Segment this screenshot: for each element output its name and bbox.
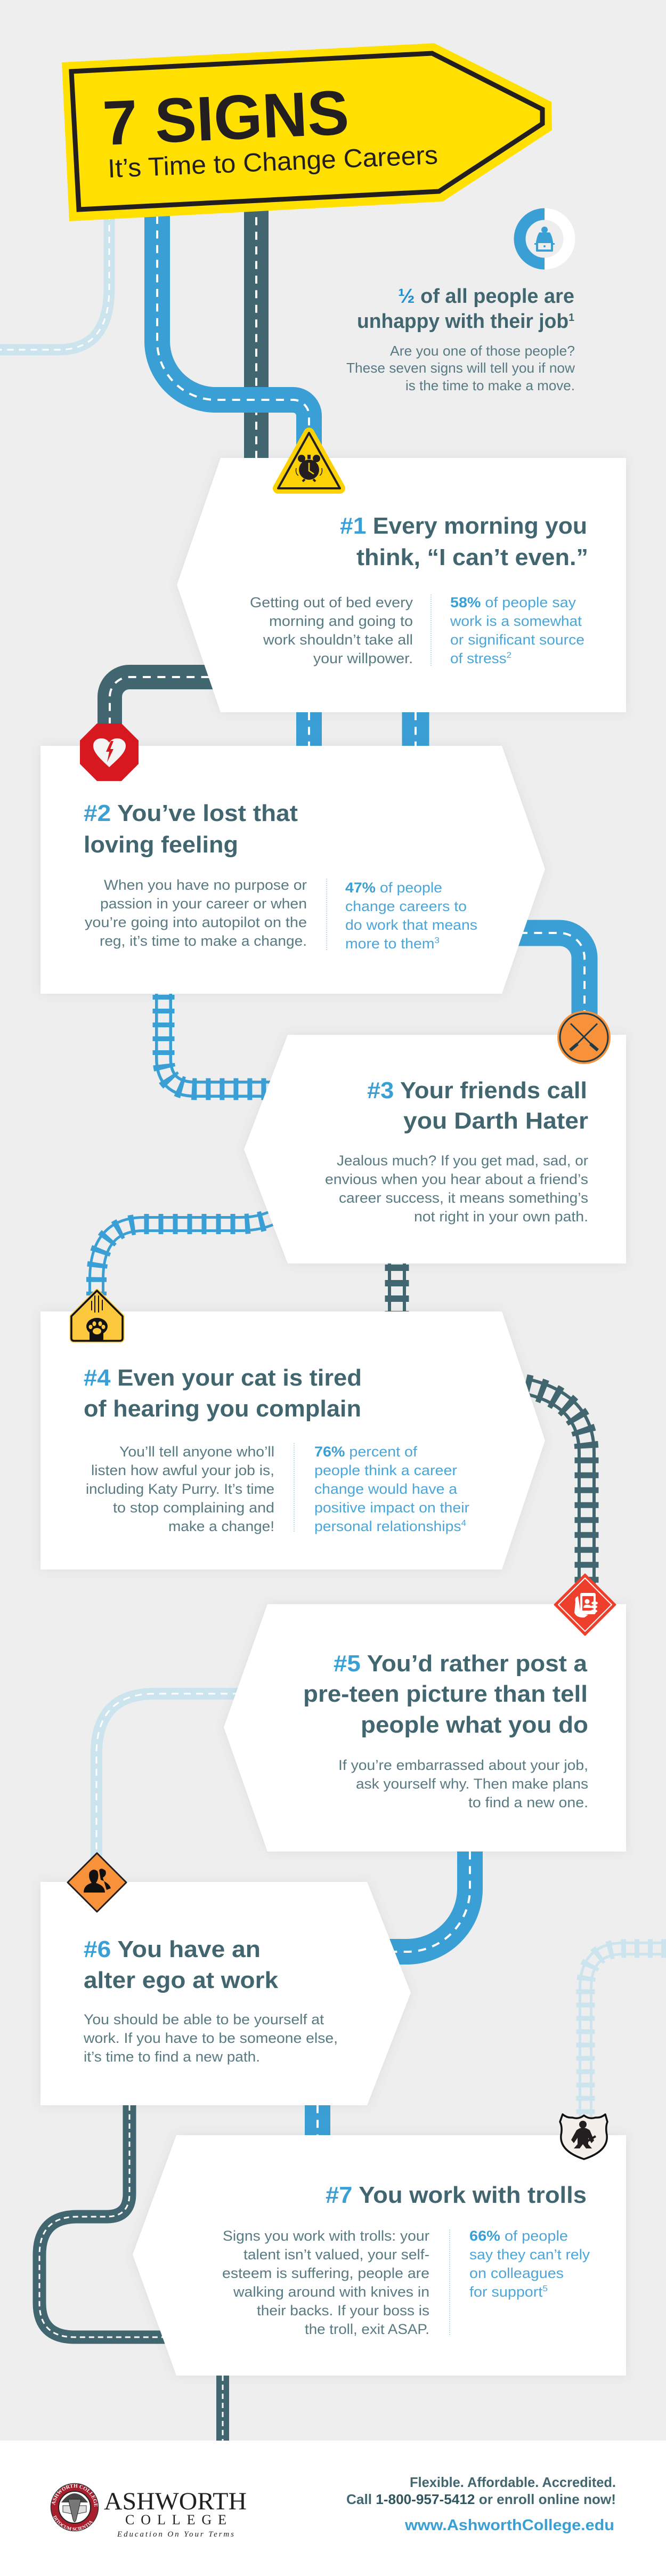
footer [0,2441,666,2576]
body text: work. If you have to be someone else, [83,2030,338,2046]
stat: 66%: 66% of people [469,2228,568,2244]
logo: Ashworth College seal: DITOCUM SCIENTIA [53,2515,93,2531]
body text: reg, it’s time to make a change. [100,933,307,949]
road: dark to stop sign [110,677,224,730]
railway: dark between panel 3 and 4 [388,1261,406,1314]
icon: warning triangle with alarm clock [278,433,340,488]
logo: wordmark: ASHWORTH [104,2488,247,2515]
heading: think, “I can’t even.” [356,544,588,570]
stat: 58%: 2 [507,651,511,660]
road: dark winding into panel 7 [39,2103,176,2337]
stat: 66%: for support [469,2284,537,2300]
railway: light blue to shield sign [586,1949,666,2119]
heading: #2 You’ve lost that [84,800,298,826]
logo: wordmark: Education On Your Terms [117,2530,234,2539]
railway: dark to red diamond [525,1386,587,1586]
body text: morning and going to [269,613,413,629]
heading [367,1077,588,1134]
stat: 47% [345,880,477,952]
stat: 58%: work is a somewhat [450,613,582,629]
heading: #1 Every morning you [340,513,587,539]
stat: 47%: 47% of people [345,880,442,896]
panel: sign 4 [40,1291,545,1569]
intro stat heading: unhappy with their job [357,310,573,333]
body text: work shouldn’t take all [263,632,413,648]
stat: 76%: 76% percent of [314,1444,418,1460]
road: blue to orange circle sign [506,933,584,1024]
body text: make a change! [168,1518,274,1534]
heading: alter ego at work [84,1967,279,1993]
body text: it’s time to find a new path. [84,2049,260,2065]
heading: of hearing you complain [84,1396,361,1422]
body text: not right in your own path. [414,1209,588,1225]
stat: 76% [314,1444,469,1534]
stat: 47%: more to them [345,936,428,952]
panel: sign 7 [133,2114,626,2376]
intro stat heading: ½ of all people are [398,285,574,308]
intro text [346,343,575,393]
body text: Signs you work with trolls: your [223,2228,429,2244]
heading: #5 You’d rather post a [334,1651,588,1677]
heading [84,1365,362,1422]
panel: sign 6 [40,1853,411,2105]
body text: You should be able to be yourself at [84,2011,324,2027]
body text: If you’re embarrassed about your job, [338,1757,588,1773]
road: dark vertical under sign [244,203,269,464]
icon: person at laptop [534,227,555,252]
heading [84,800,298,858]
icon: house sign with cat paw [71,1291,123,1341]
stat: 76%: change would have a [314,1481,457,1497]
road: light blue top left [0,213,109,350]
stat: 66%: on colleagues [469,2265,564,2281]
heading: #6 You have an [84,1936,261,1962]
intro text: is the time to make a move. [405,377,575,393]
body text: their backs. If your boss is [257,2303,429,2319]
logo: Ashworth College seal: ASHWORTH COLLEGE [52,2484,98,2507]
stat: 76%: 4 [461,1519,466,1528]
body text: including Katy Purry. It’s time [86,1481,274,1497]
panel: sign 5 [224,1574,626,1851]
intro text: These seven signs will tell you if now [346,360,575,376]
icon: red diamond with phone selfie [555,1574,615,1635]
railway: blue to cat sign [96,1215,277,1295]
panel: sign 2 [40,723,545,994]
heading: #3 Your friends call [367,1077,587,1104]
body text [338,1757,588,1810]
icon: orange diamond with two silhouettes [68,1853,126,1912]
stat: 58%: of stress [450,650,503,666]
stat: 47%: do work that means [345,917,477,933]
road: blue between panel 6 and 7 [305,2103,330,2138]
body text [86,1444,274,1534]
stat: 58% [450,594,584,666]
heading: you Darth Hater [403,1108,588,1134]
title sign [62,43,552,221]
body text: ask yourself why. Then make plans [356,1776,588,1792]
body text: Getting out of bed every [250,594,413,610]
logo: wordmark: COLLEGE [125,2512,226,2527]
stat: 66%: say they can’t rely [469,2247,590,2263]
body text [250,594,413,666]
stat: 66% [469,2228,590,2300]
icon: stop sign with broken heart [80,723,139,781]
stat: 47%: 3 [434,936,440,945]
body text: you’re going into autopilot on the [85,914,307,930]
stat: 47%: change careers to [345,898,467,914]
stat: 76%: positive impact on their [314,1500,469,1516]
road: blue between panel 5 and 6 [381,1847,470,1952]
body text [83,2011,338,2065]
stat: 58%: 58% of people say [450,594,576,610]
body text: Jealous much? If you get mad, sad, or [337,1153,588,1169]
call to action text: www.AshworthCollege.edu [404,2517,614,2534]
logo: Ashworth College seal [50,2483,99,2531]
intro stat heading: 1 [568,312,574,324]
body text: career success, it means something’s [339,1190,588,1206]
body text: esteem is suffering, people are [222,2265,429,2281]
heading: #4 Even your cat is tired [84,1365,362,1391]
stat: 76%: personal relationships [314,1518,452,1534]
subtitle: It’s Time to Change Careers [107,141,438,183]
body text: to find a new one. [468,1794,588,1810]
body text: You’ll tell anyone who’ll [119,1444,274,1460]
body text: passion in your career or when [100,896,307,912]
call to action text: Call 1-800-957-5412 or enroll online now! [346,2491,616,2507]
heading [303,1651,588,1738]
donut chart: one half [520,214,569,263]
stat: 66%: 5 [542,2284,548,2293]
logo: wordmark [104,2488,247,2539]
heading: loving feeling [84,832,238,858]
road: blue links between panel 1 and 2 [309,709,416,749]
stat: 76%: people think a career [314,1462,457,1478]
heading: #7 You work with trolls [326,2182,587,2208]
panel: sign 1 [177,433,626,712]
body text: When you have no purpose or [104,877,307,893]
heading [340,513,588,570]
icon: shield with troll [560,2114,607,2159]
call to action text: Flexible. Affordable. Accredited. [410,2474,616,2490]
heading [84,1936,279,1993]
road: blue from sign to hazard marker [157,203,309,464]
body text: envious when you hear about a friend’s [325,1171,588,1187]
panel: sign 3 [244,1011,626,1263]
intro text: Are you one of those people? [390,343,575,359]
body text [85,877,307,949]
call to action text [346,2474,616,2534]
intro stat heading [357,285,574,333]
heading: people what you do [361,1712,588,1738]
road: light blue to orange diamond [96,1694,240,1861]
body text: your willpower. [313,650,413,666]
railway: blue between panel 2 and 3 [164,992,282,1089]
icon: orange circle with crossed rifles [557,1011,611,1064]
body text [222,2228,429,2337]
body text [325,1153,588,1225]
body text: walking around with knives in [233,2284,429,2300]
title: 7 SIGNS [101,77,351,159]
body text: talent isn’t valued, your self- [243,2247,429,2263]
body text: to stop complaining and [113,1500,274,1516]
heading: pre-teen picture than tell [303,1681,588,1707]
road: dark to footer [216,2372,229,2442]
body text: the troll, exit ASAP. [305,2321,429,2337]
stat: 58%: or significant source [450,632,584,648]
body text: listen how awful your job is, [91,1462,274,1478]
